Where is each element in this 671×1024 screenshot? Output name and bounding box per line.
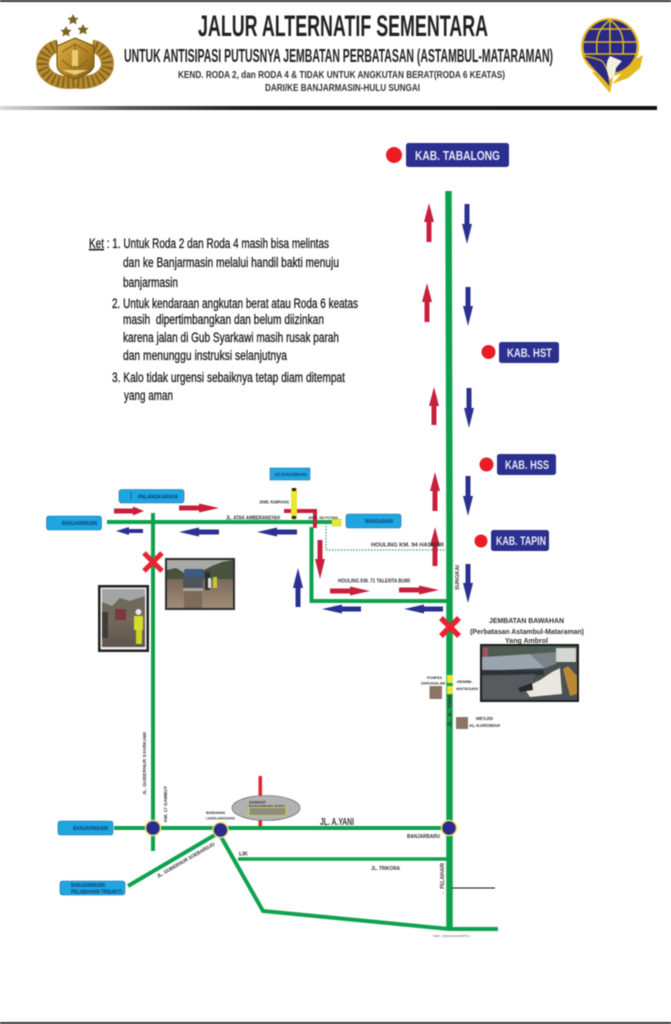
photo: collapsed bridge <box>480 644 579 702</box>
sign: Palangkaraya: PALANGKARAYA <box>138 494 178 500</box>
marker: Kab. HST: KAB. HST <box>507 348 552 360</box>
sign: Banjarmasin south: BANJARMASIN <box>73 826 108 832</box>
marker: Kab. Tapin: KAB. TAPIN <box>496 536 546 548</box>
roundabout nodes <box>146 820 456 838</box>
bridge caption: Yang Ambrol <box>505 636 548 645</box>
photo: stuck truck <box>165 558 235 610</box>
marker: Kab. HSS <box>480 454 556 475</box>
road labels: SMK / 1824/2014/AMPITU <box>433 934 470 938</box>
west road red arrows <box>114 504 439 596</box>
bridge caption: (Perbatasan Astambul-Mataraman) <box>470 627 584 636</box>
header <box>0 10 657 110</box>
notes: karena jalan di Gub Syarkawi masih rusak parah <box>123 330 339 345</box>
landmark: Samsat roundabout: BANJARBARU BARU <box>249 804 285 808</box>
road labels: BANJARBARU <box>407 834 440 840</box>
road labels: JL. GUBERNUR SOEBARDJO <box>156 841 216 880</box>
direction line: DARI/KE BANJARMASIN-HULU SUNGAI <box>265 83 420 94</box>
road labels: JL. GUBERNUR SYARKAWI <box>142 732 147 795</box>
main north-south road <box>448 191 450 930</box>
Rumpiang bridge: JEMB. RUMPIANG <box>259 500 289 504</box>
sign: Banjarmasin south <box>58 821 113 835</box>
landmark: Mesjid Al-Karomah: AL-KAROMAH <box>469 723 500 728</box>
icon: transport ministry emblem <box>581 18 643 93</box>
closure X: Gub Syarkawi <box>144 553 162 571</box>
bridge caption <box>470 616 584 645</box>
road labels: JL. ATAK AMBERANSYAH <box>226 516 280 522</box>
road labels: HOULING KM. 71 TALENTA BUMI <box>338 578 411 584</box>
Antasan bridge: ANTASAN <box>456 686 478 691</box>
sign: Banjarmasin west <box>46 516 102 530</box>
marker: Kab. Tapin <box>474 530 549 551</box>
landmark: Ponpes Darussalam <box>421 676 445 699</box>
icon: police emblem <box>43 14 107 82</box>
road labels: ← PELAIHARI <box>440 862 446 895</box>
notes: dan menunggu instruksi selanjutnya <box>123 348 287 363</box>
sign: Banjarmasin Pelabuhan Trisakti: PELABUHAN TRISAKTI <box>71 890 122 896</box>
sign: Mangasari: MANGASARI <box>365 519 393 525</box>
road labels: HOULING KM. 94 HASNUR <box>371 542 444 548</box>
title: JALUR ALTERNATIF SEMENTARA <box>198 10 488 43</box>
landmark: Mesjid Al-Karomah: MESJID <box>476 716 494 721</box>
road network <box>107 513 498 929</box>
road labels: JL. A.YANI <box>320 817 354 828</box>
sign: Mangasari <box>346 514 401 528</box>
Sei Puting bridge <box>308 515 341 526</box>
note 1: Ket : 1. Untuk Roda 2 dan Roda 4 masih bisa melintas <box>89 236 329 251</box>
bridge caption: JEMBATAN BAWAHAN <box>489 616 564 625</box>
sign: Banjarmasin west: BANJARMASIN <box>62 521 97 527</box>
landmark: Ponpes Darussalam: PONPES <box>427 676 443 680</box>
sign: Banjarmasin Pelabuhan Trisakti <box>60 881 125 896</box>
sign: Banjarbaru <box>270 468 310 480</box>
notes <box>89 236 358 403</box>
sign: Banjarbaru: KE BANJARBARU <box>275 472 307 477</box>
note 3: 3. Kalo tidak urgensi sebaiknya tetap diam ditempat <box>112 370 345 385</box>
landmark: Mesjid Al-Karomah <box>456 716 500 729</box>
Rumpiang bridge <box>259 488 297 519</box>
Antasan bridge <box>447 675 478 694</box>
road labels: JL. TRIKORA <box>371 866 400 872</box>
Sei Puting bridge: JEMB. SEI PUTING <box>308 515 338 520</box>
landmark: Samsat roundabout: SAMSAT <box>249 800 267 804</box>
header bar <box>0 106 657 110</box>
Pelaihari side line <box>452 887 495 889</box>
road labels <box>142 516 470 938</box>
southbound blue arrows <box>462 204 474 603</box>
road labels: SUNGKAI <box>455 564 461 590</box>
landmark: Samsat roundabout <box>232 776 300 826</box>
notes: dan ke Banjarmasin melalui handil bakti menuju <box>123 255 339 270</box>
marker: Kab. HSS: KAB. HSS <box>505 460 549 472</box>
road labels: BUNDARAN <box>206 811 225 815</box>
northbound red arrows <box>422 203 440 566</box>
notes: yang aman <box>124 388 173 403</box>
vehicle restriction line: KEND. RODA 2, dan RODA 4 & TIDAK UNTUK ANGKUTAN BERAT(RODA 6 KEATAS) <box>178 70 505 81</box>
closure X: Jembatan Bawahan <box>441 618 459 636</box>
photo: police officer <box>98 585 149 652</box>
road labels: KM. 17 GAMBUT <box>163 786 168 822</box>
marker: Kab. Tabalong: KAB. TABALONG <box>415 148 500 163</box>
road labels: JL. A. YANI <box>448 694 454 727</box>
west road blue arrows <box>116 527 443 614</box>
sign: Palangkaraya <box>119 490 184 503</box>
road labels: LANGLANGGANG <box>206 816 235 820</box>
marker: Kab. Tabalong <box>386 143 509 167</box>
Antasan bridge: JEMB. <box>456 679 473 684</box>
notes: masih dipertimbangkan dan belum diizinkan <box>123 312 324 327</box>
marker: Kab. HST <box>482 342 559 363</box>
sign: Banjarmasin Pelabuhan Trisakti: BANJARMASIN <box>71 883 105 889</box>
notes: banjarmasin <box>123 275 178 290</box>
landmark: Ponpes Darussalam: DARUSSALAM <box>421 682 445 686</box>
note 2: 2. Untuk kendaraan angkutan berat atau Roda 6 keatas <box>112 296 358 311</box>
road labels: LIK <box>239 852 248 858</box>
hauling route dotted line <box>326 520 445 550</box>
